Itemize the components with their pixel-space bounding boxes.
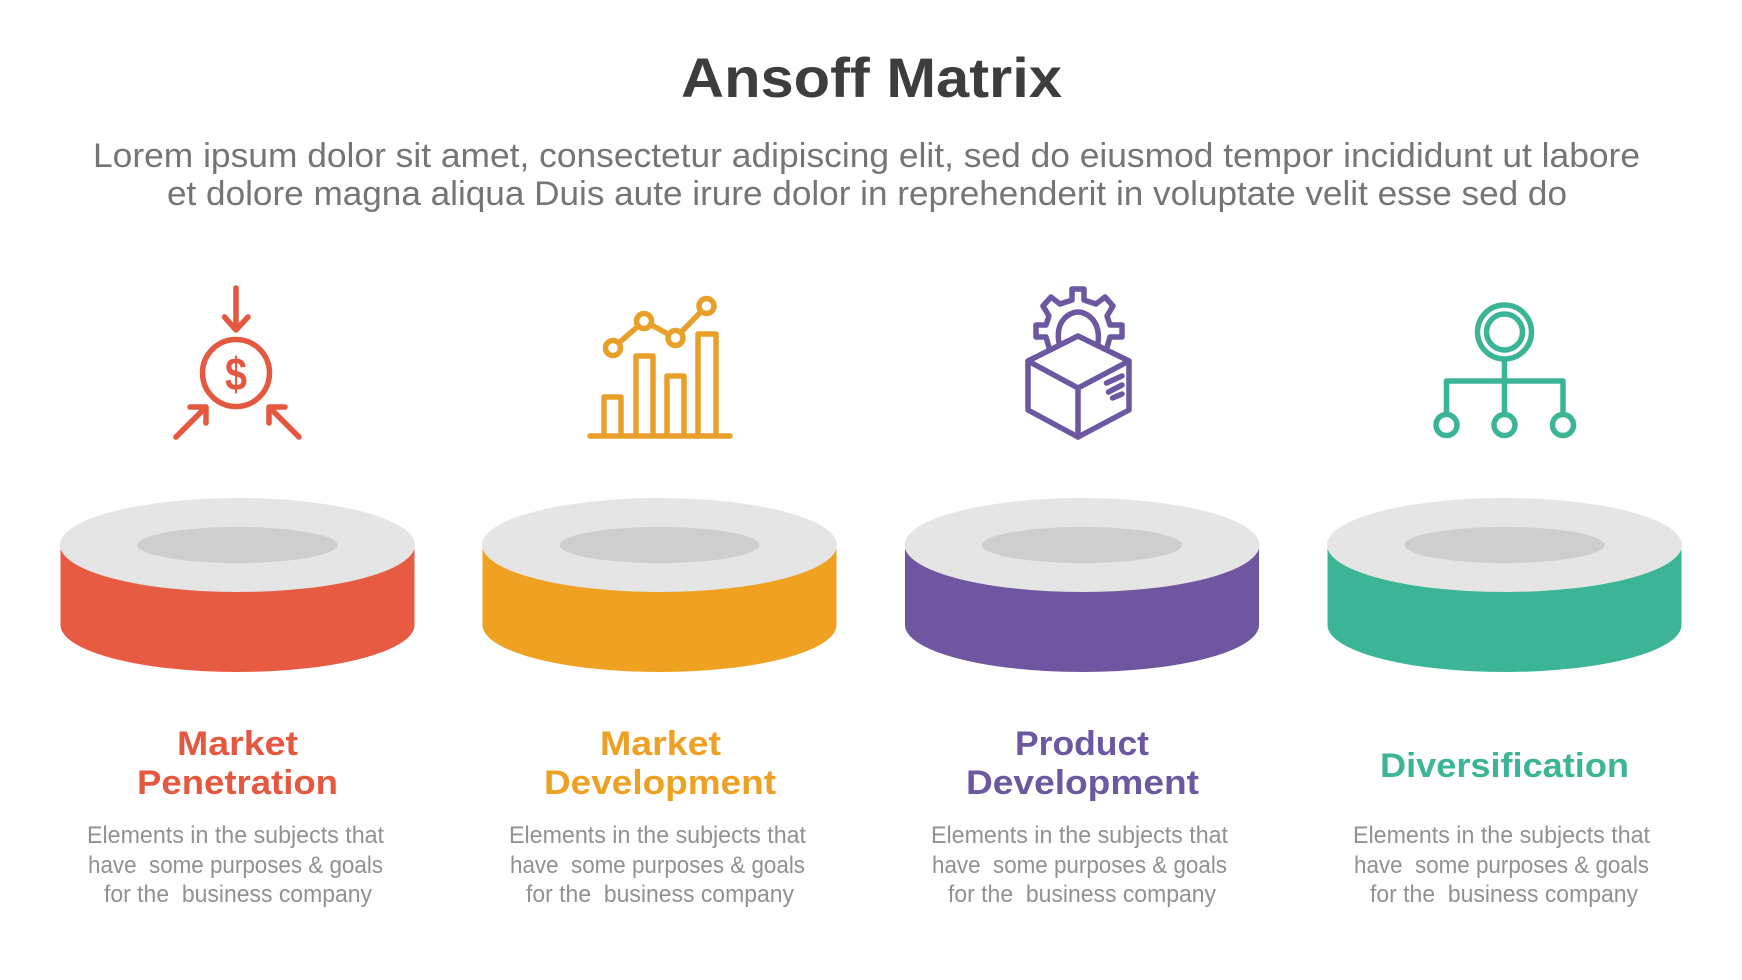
description: market penetration: have some purposes & goals xyxy=(88,852,383,879)
heading: product development xyxy=(966,725,1199,802)
cylinder: red xyxy=(60,498,415,672)
heading: diversification: Diversification xyxy=(1380,747,1629,785)
panel: diversification xyxy=(1327,305,1682,908)
heading: market development: Development xyxy=(544,764,776,802)
heading: market development: Market xyxy=(600,725,721,763)
heading: market penetration: Penetration xyxy=(137,764,338,802)
description: market penetration: Elements in the subjects that xyxy=(87,822,384,849)
cylinder: purple xyxy=(904,498,1260,672)
heading: product development: Product xyxy=(1015,725,1149,763)
panel: market development xyxy=(482,298,837,908)
cylinder: orange xyxy=(482,498,837,672)
heading: product development: Development xyxy=(966,764,1199,802)
description: diversification: Elements in the subjects that xyxy=(1353,822,1650,849)
description: diversification: have some purposes & goals xyxy=(1354,852,1649,879)
cylinder: green xyxy=(1327,498,1682,672)
icon: gear and box xyxy=(1028,289,1129,437)
panel: product development xyxy=(904,289,1260,908)
title: Ansoff Matrix xyxy=(681,46,1062,109)
icon: dollar with inward arrows xyxy=(176,288,299,437)
description: market development: have some purposes & goals xyxy=(510,852,805,879)
description: market development xyxy=(509,822,806,908)
description: diversification xyxy=(1353,822,1650,908)
description: diversification: for the business company xyxy=(1370,881,1639,908)
description: product development: Elements in the subjects that xyxy=(931,822,1228,849)
heading: market penetration xyxy=(137,725,338,802)
heading: market penetration: Market xyxy=(177,725,298,763)
subtitle text: et dolore magna aliqua Duis aute irure dolor in reprehenderit in voluptate velit esse sed do xyxy=(167,175,1567,213)
description: product development xyxy=(931,822,1228,908)
heading: market development xyxy=(544,725,776,802)
description: market development: for the business company xyxy=(526,881,795,908)
description: product development: have some purposes & goals xyxy=(932,852,1227,879)
icon: bar chart with trend line xyxy=(590,298,730,436)
description: market penetration: for the business company xyxy=(104,881,373,908)
panel: market penetration xyxy=(60,288,415,908)
description: product development: for the business company xyxy=(948,881,1217,908)
description: market penetration xyxy=(87,822,384,908)
subtitle text xyxy=(93,137,1640,213)
icon: dollar with inward arrows: $ xyxy=(225,348,247,400)
icon: branching hierarchy xyxy=(1436,305,1574,436)
subtitle text: Lorem ipsum dolor sit amet, consectetur adipiscing elit, sed do eiusmod tempor incididunt ut labore xyxy=(93,137,1640,175)
description: market development: Elements in the subjects that xyxy=(509,822,806,849)
